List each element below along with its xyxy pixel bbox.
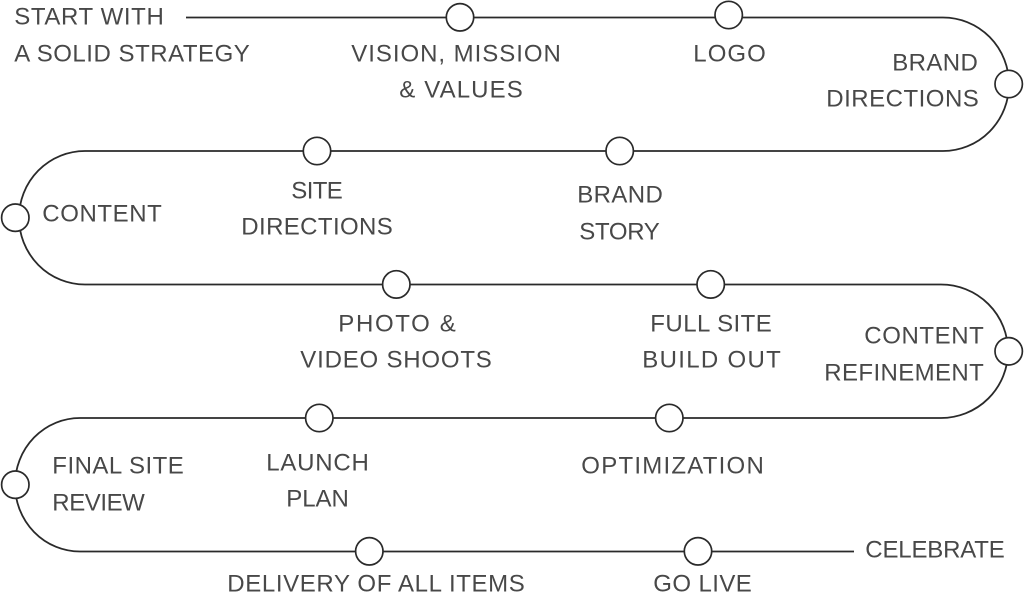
milestone: content refinement: CONTENT: [864, 322, 984, 349]
milestone: delivery of all items: DELIVERY OF ALL ITEMS: [227, 570, 525, 597]
milestone: launch plan: [266, 404, 369, 512]
milestone: go live: GO LIVE: [653, 570, 752, 597]
milestone: vision, mission and values: & VALUES: [399, 76, 523, 103]
milestone: brand directions: BRAND: [892, 49, 978, 76]
milestone: optimization: OPTIMIZATION: [581, 452, 764, 479]
milestone: optimization: [581, 404, 764, 479]
start label: A SOLID STRATEGY: [14, 40, 250, 67]
milestone: photo and video shoots: [300, 271, 492, 373]
milestone: site directions: DIRECTIONS: [241, 213, 393, 240]
milestone: full site build out: FULL SITE: [650, 310, 772, 337]
start label: [14, 3, 250, 67]
milestone: content refinement: [824, 322, 1022, 386]
milestone: full site build out: BUILD OUT: [642, 346, 781, 373]
milestone: brand story: [577, 137, 663, 245]
milestone: brand story: BRAND: [577, 181, 663, 208]
milestone: launch plan: LAUNCH: [266, 449, 369, 476]
milestone: logo: [693, 1, 766, 67]
milestone: content: [2, 200, 162, 231]
milestone: vision, mission and values: [351, 4, 561, 103]
milestone: full site build out: [642, 271, 781, 373]
milestone: brand directions: [826, 49, 1022, 112]
milestone: content: CONTENT: [42, 200, 162, 227]
milestone: final site review: [2, 452, 184, 516]
milestone: site directions: [241, 137, 393, 240]
milestone: vision, mission and values: VISION, MISSION: [351, 40, 561, 67]
milestone: final site review: REVIEW: [52, 489, 145, 516]
milestone: launch plan: PLAN: [286, 485, 349, 512]
milestone: brand directions: DIRECTIONS: [826, 85, 979, 112]
milestone: final site review: FINAL SITE: [52, 452, 184, 479]
milestone: photo and video shoots: VIDEO SHOOTS: [300, 346, 492, 373]
end label: celebrate: CELEBRATE: [865, 536, 1005, 563]
milestone: logo: LOGO: [693, 40, 766, 67]
milestone: site directions: SITE: [291, 177, 343, 204]
milestone: delivery of all items: [227, 538, 525, 597]
milestone: content refinement: REFINEMENT: [824, 359, 984, 386]
milestone: brand story: STORY: [579, 218, 660, 245]
milestone: photo and video shoots: PHOTO &: [338, 310, 456, 337]
start label: START WITH: [14, 3, 164, 30]
milestone: go live: [653, 538, 752, 597]
